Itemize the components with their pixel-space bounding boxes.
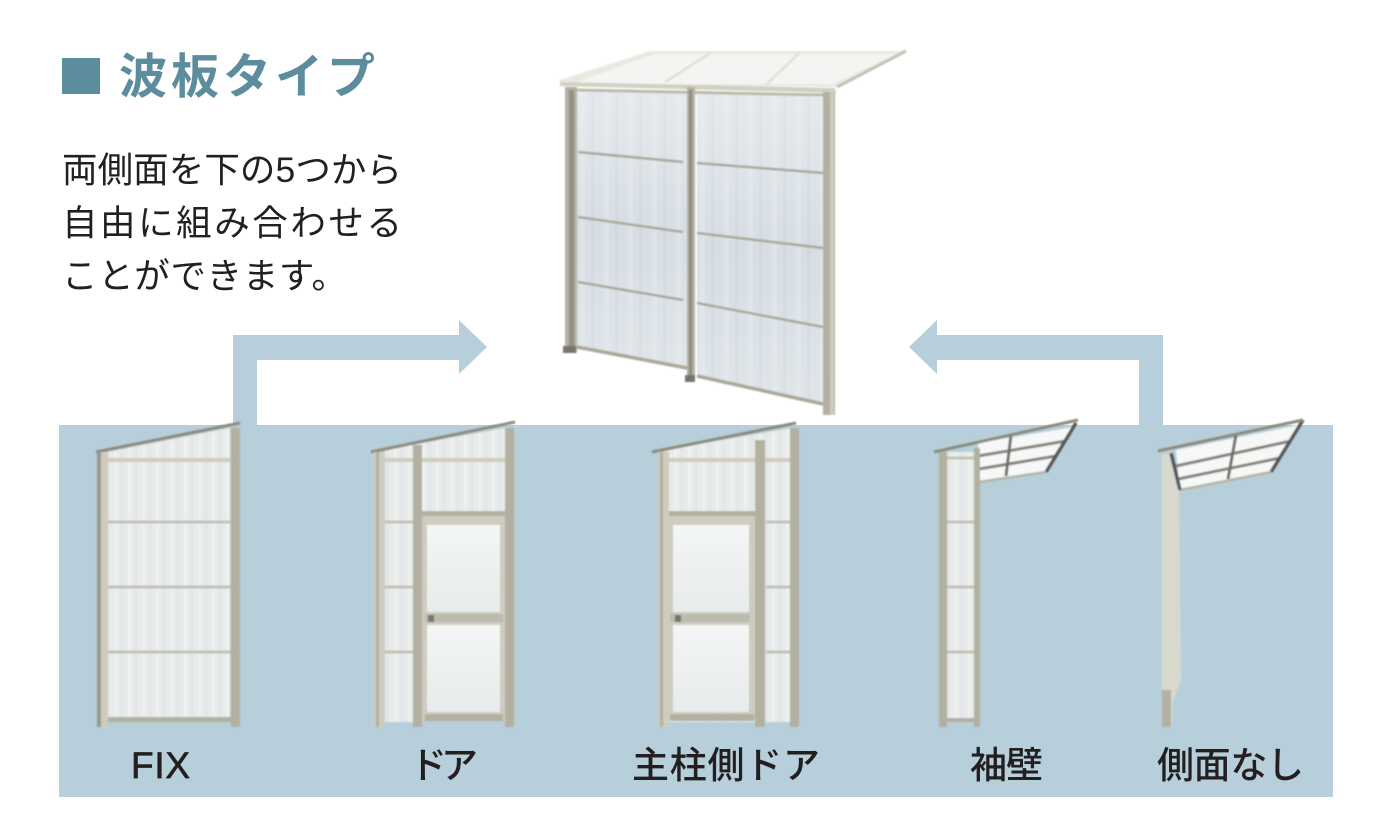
description text: ことができます。 (62, 256, 347, 296)
arrow: left option group to main product (233, 320, 487, 425)
description text: 両側面を下の5つから (62, 150, 402, 190)
panel: options background (59, 425, 1333, 797)
option image: no side panel (1158, 420, 1303, 727)
description text: 自由に組み合わせる (62, 203, 402, 243)
main product: carport with corrugated side panels (560, 51, 907, 415)
label: FIX: FIX (131, 745, 190, 786)
option image: FIX (96, 423, 240, 727)
arrow: right option group to main product (909, 320, 1163, 425)
label: sleeve wall: 袖壁 (970, 745, 1043, 786)
description text (62, 150, 402, 296)
label: no side panel: 側面なし (1157, 745, 1304, 786)
label: door: ドア (410, 745, 478, 786)
title marker square (62, 58, 100, 94)
option image: sleeve wall (934, 420, 1078, 727)
title: 波板タイプ (119, 51, 375, 104)
option image: main post side door (652, 423, 799, 727)
label: main post side door: 主柱側ドア (632, 745, 820, 786)
option image: door (371, 422, 515, 727)
